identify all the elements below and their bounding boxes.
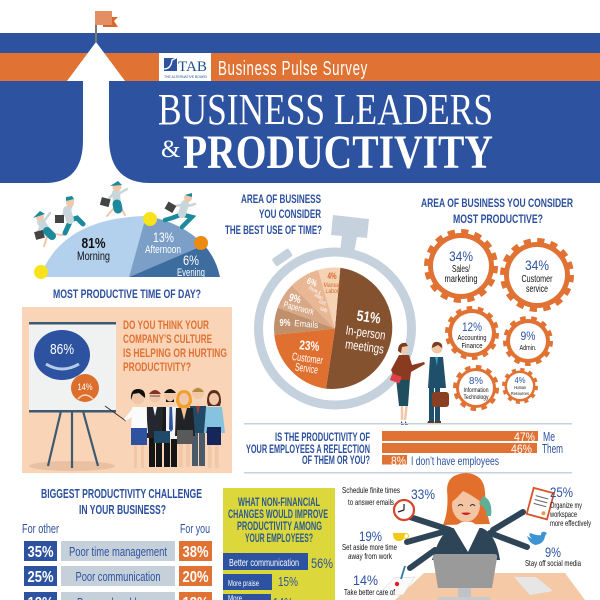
icon: twitter bird (527, 532, 547, 545)
gear: human resources: Human (514, 385, 526, 391)
panel: productivity reflection (246, 429, 563, 468)
pie labels: 9% (280, 318, 291, 329)
heading: IN YOUR BUSINESS? (79, 503, 166, 517)
bar: them: 46% (511, 442, 532, 456)
presentation board (29, 322, 116, 468)
pie labels: 9% (287, 292, 302, 306)
gear: information technology: Information (464, 387, 489, 394)
header banner (0, 11, 600, 183)
panel: biggest productivity challenge (22, 487, 212, 600)
gear: human resources: 4% (514, 376, 526, 385)
businessman (427, 342, 449, 424)
gear: customer service: 34% (525, 257, 549, 273)
label: afternoon: Afternoon (145, 244, 181, 256)
heading: CHANGES WOULD IMPROVE (228, 507, 328, 521)
question: COMPANY’S CULTURE (123, 332, 212, 346)
logo: TAB (178, 59, 207, 75)
logo (159, 53, 211, 81)
question: PRODUCTIVITY? (123, 360, 191, 374)
bar: no employees: 8% (391, 454, 406, 468)
tip: time away: Set aside more time (342, 542, 397, 552)
computer monitor (433, 554, 497, 600)
panel: best use of time (225, 192, 449, 425)
column labels: For other (22, 521, 59, 536)
tip: schedule: Schedule finite times (342, 485, 400, 495)
bar: more praise: More praise (228, 578, 259, 588)
14 percent frown (71, 374, 99, 402)
icon: coffee cup (393, 533, 408, 541)
gear: human resources: Resources (511, 391, 529, 397)
question: DO YOU THINK YOUR (123, 318, 209, 332)
gear: sales and marketing: Sales/ (452, 264, 470, 275)
icon: paper and pen (378, 566, 415, 595)
question (123, 318, 227, 374)
label: afternoon: 13% (153, 229, 174, 245)
label: morning: 81% (82, 235, 106, 252)
gear: accounting and finance: Accounting (458, 333, 486, 342)
question: IS THE PRODUCTIVITY OF (275, 432, 370, 444)
tip: time away (342, 528, 397, 561)
row: personal problems (24, 592, 212, 600)
panel: most productive time of day (33, 181, 220, 301)
row: poor time management: 35% (28, 544, 54, 561)
heading (228, 495, 328, 545)
pie labels: 4% (328, 271, 336, 281)
pie labels: 6% (306, 276, 318, 289)
question (246, 432, 370, 467)
row: poor time management (24, 541, 212, 561)
label: morning (77, 235, 110, 263)
gear: customer service: service (526, 284, 548, 295)
notebook (514, 577, 553, 595)
tip: health: 14% (353, 572, 378, 588)
gear: accounting and finance (448, 308, 496, 358)
pie labels (280, 271, 386, 377)
heading: MOST PRODUCTIVE? (453, 212, 543, 226)
panel: most productive area (421, 196, 573, 408)
title line 2: PRODUCTIVITY (183, 126, 493, 179)
bar: better communication: Better communication (229, 558, 299, 569)
tip: health (344, 572, 395, 597)
label: evening (177, 252, 205, 279)
bar: me (382, 429, 555, 444)
tip: time away: away from work (348, 551, 393, 561)
bar: them: Them (542, 441, 563, 456)
tip: schedule: 33% (411, 486, 435, 502)
title ampersand: & (161, 136, 180, 163)
tip: schedule: to answer emails (348, 497, 394, 507)
pie labels: 51% (356, 307, 382, 328)
question: IS HELPING OR HURTING (123, 346, 227, 360)
row: poor communication (24, 566, 212, 586)
morning segment (40, 216, 146, 277)
heading (421, 196, 573, 226)
desk (395, 573, 585, 600)
pie labels: conf. (318, 299, 328, 308)
gear: accounting and finance: 12% (462, 320, 482, 334)
14 percent frown: 14% (78, 382, 93, 393)
pointer (105, 406, 126, 421)
flag (95, 11, 118, 42)
evening segment (129, 245, 220, 277)
gear: admin (506, 318, 550, 364)
question: YOUR EMPLOYEES A REFLECTION (246, 444, 370, 456)
label: afternoon (145, 229, 181, 256)
heading: WHAT NON-FINANCIAL (238, 495, 320, 509)
pie labels: Phone & (307, 286, 322, 297)
runner 4 (165, 193, 195, 227)
heading: AREA OF BUSINESS (241, 192, 321, 206)
stopwatch (258, 215, 412, 405)
gear: sales and marketing (428, 232, 494, 300)
bar: more praise: 15% (278, 574, 298, 589)
pie labels: meetings (344, 336, 385, 357)
bar: no employees: I don’t have employees (411, 454, 499, 468)
heading: YOUR EMPLOYEES? (245, 531, 313, 545)
tip: organize: workspace (549, 510, 577, 519)
row: poor communication: 25% (28, 569, 54, 586)
tip: social media: 9% (545, 544, 561, 560)
gear: admin: Admin. (520, 343, 536, 352)
panel: productivity tips (342, 473, 591, 600)
pie labels: 23% (299, 337, 320, 354)
bar: me: Me (543, 429, 555, 444)
bar: them (382, 441, 563, 456)
gear: human resources (504, 370, 536, 402)
label: morning: Morning (77, 249, 110, 263)
afternoon segment (129, 216, 204, 277)
question: OF THEM OR YOU? (302, 455, 370, 467)
runner 3 (100, 181, 127, 216)
pie labels: Customer (291, 351, 324, 367)
row: poor time management: 38% (182, 544, 208, 561)
86 percent smile (34, 330, 90, 380)
86 percent smile: 86% (50, 341, 74, 358)
runner 2 (55, 196, 83, 233)
tip: organize: Organize my (550, 501, 582, 510)
pie labels: Labor (326, 288, 339, 295)
tip: schedule (342, 485, 435, 507)
gear: information technology (456, 368, 496, 408)
heading: BIGGEST PRODUCTIVITY CHALLENGE (41, 487, 202, 501)
heading: PRODUCTIVITY AMONG (237, 519, 322, 533)
bar: more (223, 594, 293, 600)
heading (41, 487, 202, 517)
heading: YOU CONSIDER (259, 207, 321, 221)
bar: better communication (223, 553, 333, 571)
tip: social media (525, 544, 581, 568)
logo: THE ALTERNATIVE BOARD (164, 75, 207, 79)
runner 1 (33, 211, 63, 246)
pie labels: Paperwork (283, 299, 315, 317)
title line 1: BUSINESS LEADERS (158, 85, 493, 134)
gear: customer service (504, 242, 570, 308)
bar: better communication: 56% (311, 555, 333, 571)
heading: MOST PRODUCTIVE TIME OF DAY? (53, 287, 201, 301)
pie labels: calls (319, 306, 328, 315)
panel: non-financial changes (223, 488, 335, 600)
label: evening: 6% (183, 252, 199, 268)
arrow (45, 42, 150, 183)
team of people (124, 387, 225, 468)
row: poor communication: Poor communication (76, 569, 160, 584)
businesswoman with many arms (407, 473, 527, 568)
gear: sales and marketing: 34% (449, 248, 473, 264)
icon: clipboard (527, 488, 554, 519)
column labels: For you (180, 521, 210, 536)
panel: company culture (22, 307, 232, 473)
column labels (22, 521, 210, 536)
pie labels: Emails (294, 318, 319, 330)
pie labels: Manual (324, 282, 341, 289)
bar: me: 47% (514, 430, 535, 444)
heading: THE BEST USE OF TIME? (225, 223, 322, 237)
gear: accounting and finance: Finance (462, 341, 482, 350)
shadow (29, 461, 115, 471)
survey name: Business Pulse Survey (218, 58, 368, 80)
label: evening: Evening (177, 267, 205, 279)
heading (225, 192, 322, 237)
tip: organize (549, 484, 591, 528)
tip: time away: 19% (359, 528, 382, 544)
gear: information technology: Technology (464, 394, 489, 401)
pie labels: Service (294, 361, 319, 377)
gear: customer service: Customer (522, 274, 553, 285)
row: poor communication: 20% (182, 569, 208, 586)
pie labels: In-person (345, 322, 386, 343)
row: poor time management: Poor time management (69, 544, 167, 559)
pie labels: video (313, 292, 324, 302)
gear: sales and marketing: marketing (444, 274, 478, 285)
icon: clock (394, 500, 414, 520)
gear: information technology: 8% (469, 376, 483, 387)
gear: admin: 9% (520, 329, 536, 343)
bar: no employees (382, 454, 499, 468)
tip: organize: 25% (550, 484, 573, 500)
bar: more praise (223, 574, 298, 590)
tip: health: Take better care of (344, 587, 395, 597)
timeline dots (34, 212, 208, 279)
businesswoman (390, 343, 425, 425)
pie chart (274, 267, 392, 389)
